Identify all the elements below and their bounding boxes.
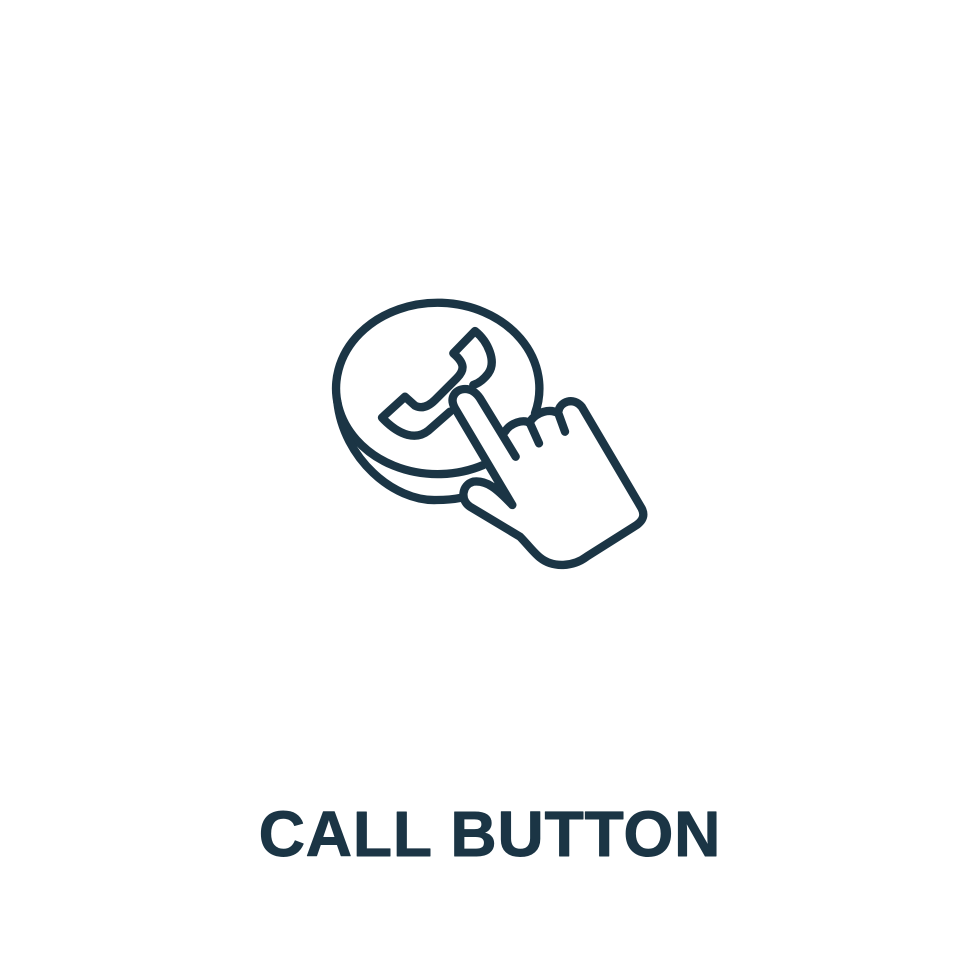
title: CALL BUTTON — [259, 798, 721, 870]
icon: phone handset — [382, 331, 492, 436]
icon: pointing hand — [453, 389, 643, 565]
button top face — [336, 303, 539, 474]
button base — [337, 402, 462, 500]
icon: call button with pressing hand — [336, 303, 643, 565]
